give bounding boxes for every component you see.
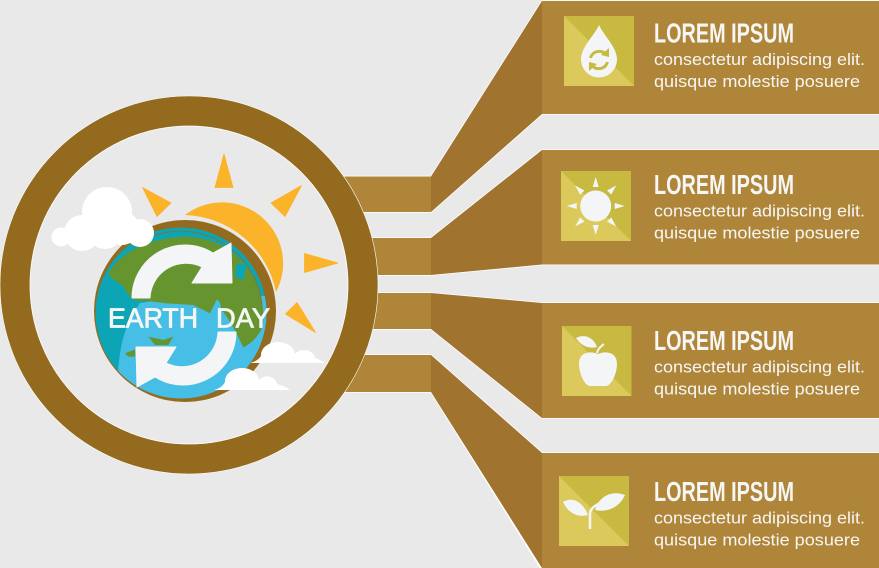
panel: row 4 <box>542 453 879 568</box>
text block: row 3 <box>654 358 865 398</box>
cloud: lower <box>214 368 290 390</box>
icon: sun behind globe <box>142 154 338 332</box>
cloud: top left <box>52 187 154 251</box>
text block: row 4: quisque molestie posuere <box>654 530 860 550</box>
text block: row 1: consectetur adipiscing elit. <box>654 50 865 69</box>
connector: row 2 <box>300 150 879 275</box>
text block: row 2: quisque molestie posuere <box>654 224 860 242</box>
connector: row 1 <box>300 1 879 212</box>
ocean light <box>118 290 270 400</box>
globe label: DAY <box>216 302 270 334</box>
text block: row 4: consectetur adipiscing elit. <box>654 508 865 528</box>
heading: row 1: LOREM IPSUM <box>654 18 794 48</box>
icon: sprout <box>559 476 629 546</box>
heading: row 2: LOREM IPSUM <box>654 169 794 200</box>
icon: sun <box>561 171 631 241</box>
ring <box>0 96 378 474</box>
land masses <box>108 237 263 357</box>
icon: water drop with recycle arrows <box>564 16 634 86</box>
text block: row 3: quisque molestie posuere <box>654 380 860 398</box>
globe <box>94 220 276 402</box>
text block: row 3: consectetur adipiscing elit. <box>654 358 865 376</box>
scribble line on globe <box>135 231 262 305</box>
text block: row 1 <box>654 50 865 91</box>
connector: row 3 <box>300 293 879 418</box>
panel: row 1 <box>542 1 879 114</box>
icon: apple <box>562 326 632 396</box>
connector: row 4 <box>300 355 879 568</box>
text block: row 2 <box>654 202 865 242</box>
cloud: right <box>250 342 325 363</box>
text block: row 1: quisque molestie posuere <box>654 72 860 91</box>
panel: row 3 <box>542 303 879 418</box>
icon: recycle arrows <box>132 243 236 387</box>
heading: row 3: LOREM IPSUM <box>654 325 794 356</box>
globe label <box>108 302 270 334</box>
panel: row 2 <box>542 150 879 264</box>
globe label: EARTH <box>108 302 198 334</box>
heading: row 4: LOREM IPSUM <box>654 476 794 507</box>
text block: row 2: consectetur adipiscing elit. <box>654 202 865 220</box>
text block: row 4 <box>654 508 865 550</box>
